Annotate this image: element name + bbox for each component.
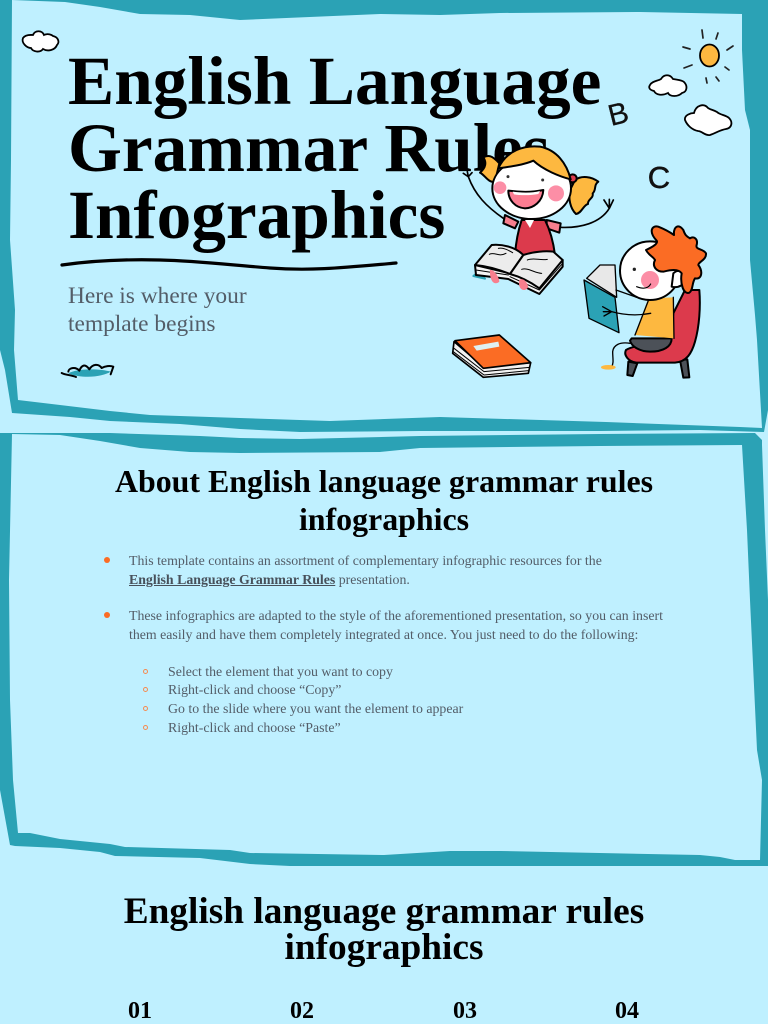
heading: about: infographics xyxy=(299,502,469,537)
illustration: girl's open book xyxy=(473,245,563,294)
bullet: first paragraph: This template contains an assortment of complementary infographic resources for the xyxy=(129,553,602,568)
letter C: C xyxy=(648,160,670,195)
sub-bullet: select: Select the element that you want to copy xyxy=(168,664,393,679)
title xyxy=(68,42,601,253)
icon: sun xyxy=(683,30,733,83)
bullet: second paragraph xyxy=(104,608,663,642)
bullet: second paragraph: them easily and have them completely integrated at once. You just need to do the following: xyxy=(129,627,638,642)
subtitle xyxy=(68,283,247,336)
frame: slide 2 xyxy=(0,433,768,866)
title: Grammar Rules xyxy=(68,109,550,186)
title: English Language xyxy=(68,42,601,119)
bullet: second paragraph: These infographics are adapted to the style of the aforementioned presentation, so you can insert xyxy=(129,608,663,623)
icon: cloud lower right xyxy=(685,105,731,135)
icon: cloud upper right xyxy=(649,75,686,96)
sub-bullet: paste: Right-click and choose “Paste” xyxy=(168,720,341,735)
subtitle: template begins xyxy=(68,310,215,336)
number 01: 01 xyxy=(128,998,152,1024)
subtitle: Here is where your xyxy=(68,283,247,309)
heading: about xyxy=(115,464,653,537)
title underline xyxy=(60,258,398,271)
icon: grass tuft xyxy=(62,365,113,377)
icon: small cloud top left xyxy=(23,31,58,52)
frame: slide 1 xyxy=(0,0,768,432)
letter B: B xyxy=(605,96,632,133)
sub-bullet: copy: Right-click and choose “Copy” xyxy=(168,682,341,697)
number 04: 04 xyxy=(615,998,639,1024)
bullet: first paragraph xyxy=(104,553,602,587)
heading: infographics slide: infographics xyxy=(285,927,483,968)
illustrations xyxy=(22,29,734,379)
illustration: girl reading xyxy=(463,146,613,294)
illustration: boy reading on chair xyxy=(584,226,706,378)
title: Infographics xyxy=(68,176,445,253)
number 03: 03 xyxy=(453,998,477,1024)
sub-bullet: go to slide: Go to the slide where you want the element to appear xyxy=(168,701,463,716)
bullet list xyxy=(104,553,663,735)
heading: infographics slide: English language grammar rules xyxy=(124,891,644,932)
heading: infographics slide xyxy=(124,891,644,968)
illustration: closed orange book xyxy=(453,335,531,377)
bullet: first paragraph: English Language Grammar Rules presentation. xyxy=(129,572,410,587)
number 02: 02 xyxy=(290,998,314,1024)
heading: about: About English language grammar rules xyxy=(115,464,653,499)
